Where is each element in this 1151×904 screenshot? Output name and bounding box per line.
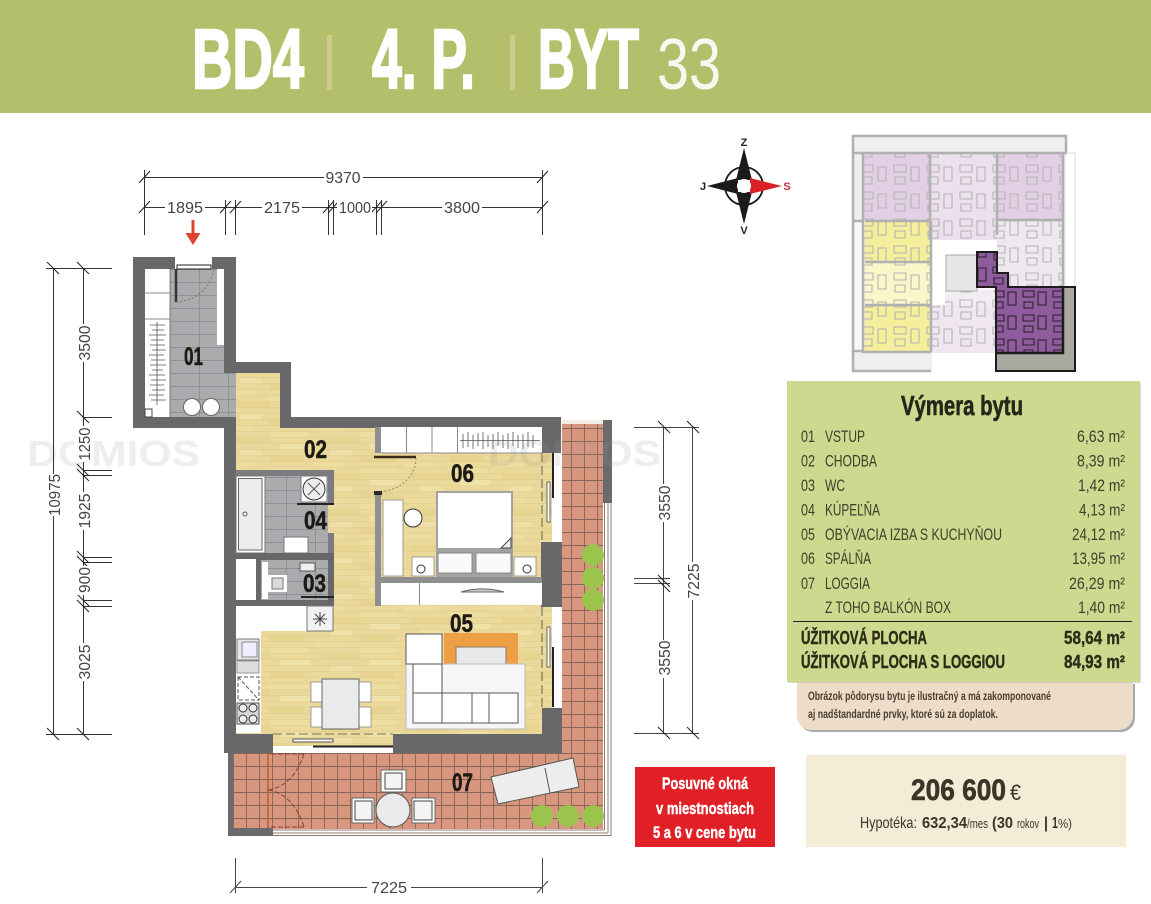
table rows: LOGGIA	[825, 574, 870, 593]
left dimensions: 3025	[77, 644, 94, 680]
table rows: 04	[801, 500, 815, 520]
note box	[797, 680, 1135, 732]
top dimensions: 9370	[326, 170, 361, 187]
price box	[806, 755, 1126, 847]
room label 06: 06	[451, 460, 474, 488]
bedroom window	[542, 453, 553, 542]
top dimensions: 3800	[444, 200, 480, 217]
mortgage: (30	[992, 815, 1013, 832]
top dimensions	[139, 168, 548, 235]
table rows: SPÁLŇA	[825, 549, 871, 568]
top dimensions: 1895	[167, 200, 203, 217]
right dimensions: 7225	[686, 563, 703, 598]
table rows: 6,63 m²	[1077, 427, 1125, 446]
watermark right: DOMIOS	[488, 433, 661, 474]
table rows: 07	[801, 574, 815, 593]
entrance hall floor	[170, 269, 236, 417]
price box: €	[1010, 780, 1021, 805]
living room window	[542, 607, 553, 708]
right dimensions: 3550	[657, 485, 674, 520]
table rows: 26,29 m²	[1069, 574, 1125, 593]
bottom dimension	[230, 858, 548, 897]
table rows: 8,39 m²	[1077, 452, 1125, 470]
top dimensions: 1000	[339, 200, 371, 217]
totals: ÚŽITKOVÁ PLOCHA	[801, 627, 927, 648]
mortgage: %)	[1058, 816, 1072, 831]
compass: J	[700, 181, 706, 193]
kitchen	[236, 606, 333, 733]
room label 05: 05	[450, 610, 473, 638]
note text: Obrázok pôdorysu bytu je ilustračný a má zakomponované	[808, 689, 1051, 703]
title divider	[327, 35, 332, 90]
floor plan	[133, 257, 612, 836]
bottom dimension: 7225	[371, 880, 407, 897]
top dimensions: 2175	[264, 200, 300, 217]
left dimensions: 900	[77, 567, 94, 593]
entrance door	[175, 257, 214, 302]
header band	[0, 0, 1151, 113]
entrance arrow	[186, 220, 200, 245]
mortgage: /mes	[967, 816, 988, 831]
bedroom door swing	[376, 458, 416, 492]
rug and coffee table	[444, 633, 518, 693]
watermark left: DOMIOS	[27, 433, 200, 474]
night stands	[412, 557, 536, 576]
red callout: v miestnostiach	[656, 799, 754, 818]
table rows: 06	[801, 549, 815, 568]
hall wardrobe	[145, 269, 224, 417]
table rows: VSTUP	[825, 427, 865, 446]
hall stools	[184, 398, 220, 416]
sun lounger	[491, 758, 579, 804]
table rows: 1,40 m²	[1078, 598, 1125, 617]
table rows: 24,12 m²	[1072, 525, 1125, 544]
title: BD4: BD4	[192, 12, 304, 106]
room label 04: 04	[304, 507, 327, 535]
title: flat number: 33	[657, 25, 721, 105]
table rows	[801, 427, 1125, 617]
bathroom	[236, 470, 334, 570]
table rows: WC	[825, 476, 845, 495]
table rows: 03	[801, 476, 815, 495]
right dimensions	[634, 421, 703, 739]
bedroom partition	[374, 491, 542, 606]
bed	[436, 491, 513, 577]
compass	[700, 137, 791, 237]
table rows: 4,13 m²	[1079, 500, 1125, 520]
table rows: 01	[801, 427, 815, 446]
room label 07: 07	[452, 769, 473, 797]
left dimensions: 10975	[47, 474, 64, 516]
room label 01: 01	[184, 343, 203, 371]
walls	[133, 257, 561, 753]
table rows: 05	[801, 525, 815, 544]
desk and stool	[383, 500, 422, 576]
left dimensions: 1250	[77, 427, 94, 460]
room label 02: 02	[304, 436, 327, 464]
totals: 58,64 m²	[1064, 628, 1125, 648]
highlighted flat	[977, 252, 1075, 371]
red callout: 5 a 6 v cene bytu	[653, 823, 756, 842]
compass: S	[783, 181, 791, 193]
key plan of the floor	[853, 136, 1075, 371]
mortgage: Hypotéka:	[860, 815, 917, 832]
wood floor: rooms 02, 05, 06	[236, 373, 552, 748]
red callout: Posuvné okná	[662, 774, 748, 793]
title: floor: 4. P.	[372, 12, 475, 106]
closet and WC	[236, 553, 334, 606]
left dimensions: 3500	[77, 325, 94, 360]
living room door	[273, 734, 393, 749]
table rows: OBÝVACIA IZBA S KUCHYŇOU	[825, 525, 1002, 544]
totals: 84,93 m²	[1064, 652, 1125, 672]
totals	[801, 627, 1125, 672]
table rows: CHODBA	[825, 452, 877, 470]
room label 03: 03	[303, 570, 326, 598]
compass: V	[740, 225, 748, 237]
table title: Výmera bytu	[901, 390, 1023, 421]
loggia floor	[228, 420, 612, 836]
mortgage: 632,34	[922, 815, 967, 832]
price: 206 600	[911, 774, 1006, 807]
right dimensions: 3550	[657, 640, 674, 676]
compass: Z	[741, 137, 748, 149]
mortgage	[860, 815, 1072, 832]
red callout	[635, 767, 775, 847]
sofa	[406, 634, 525, 729]
left dimensions: 1925	[77, 493, 94, 528]
table rows: 02	[801, 452, 815, 470]
plants	[531, 544, 604, 827]
TV unit	[381, 583, 542, 605]
mortgage: |	[1044, 815, 1048, 832]
table rows: KÚPEĽŇA	[825, 500, 880, 520]
totals: ÚŽITKOVÁ PLOCHA S LOGGIOU	[801, 651, 1005, 672]
title: flat: BYT	[538, 12, 639, 106]
table rows: 13,95 m²	[1072, 549, 1125, 568]
loggia table set	[352, 770, 435, 827]
dining table	[311, 679, 371, 729]
mortgage: 1	[1052, 815, 1058, 832]
mortgage: rokov	[1017, 816, 1039, 831]
title divider	[510, 35, 515, 90]
table rows: 1,42 m²	[1078, 476, 1125, 495]
bedroom wardrobe	[374, 427, 542, 457]
area table panel	[787, 381, 1141, 683]
table rows: Z TOHO BALKÓN BOX	[825, 598, 951, 617]
left dimensions	[44, 262, 112, 740]
note box: aj nadštandardné prvky, ktoré sú za doplatok.	[808, 707, 998, 721]
